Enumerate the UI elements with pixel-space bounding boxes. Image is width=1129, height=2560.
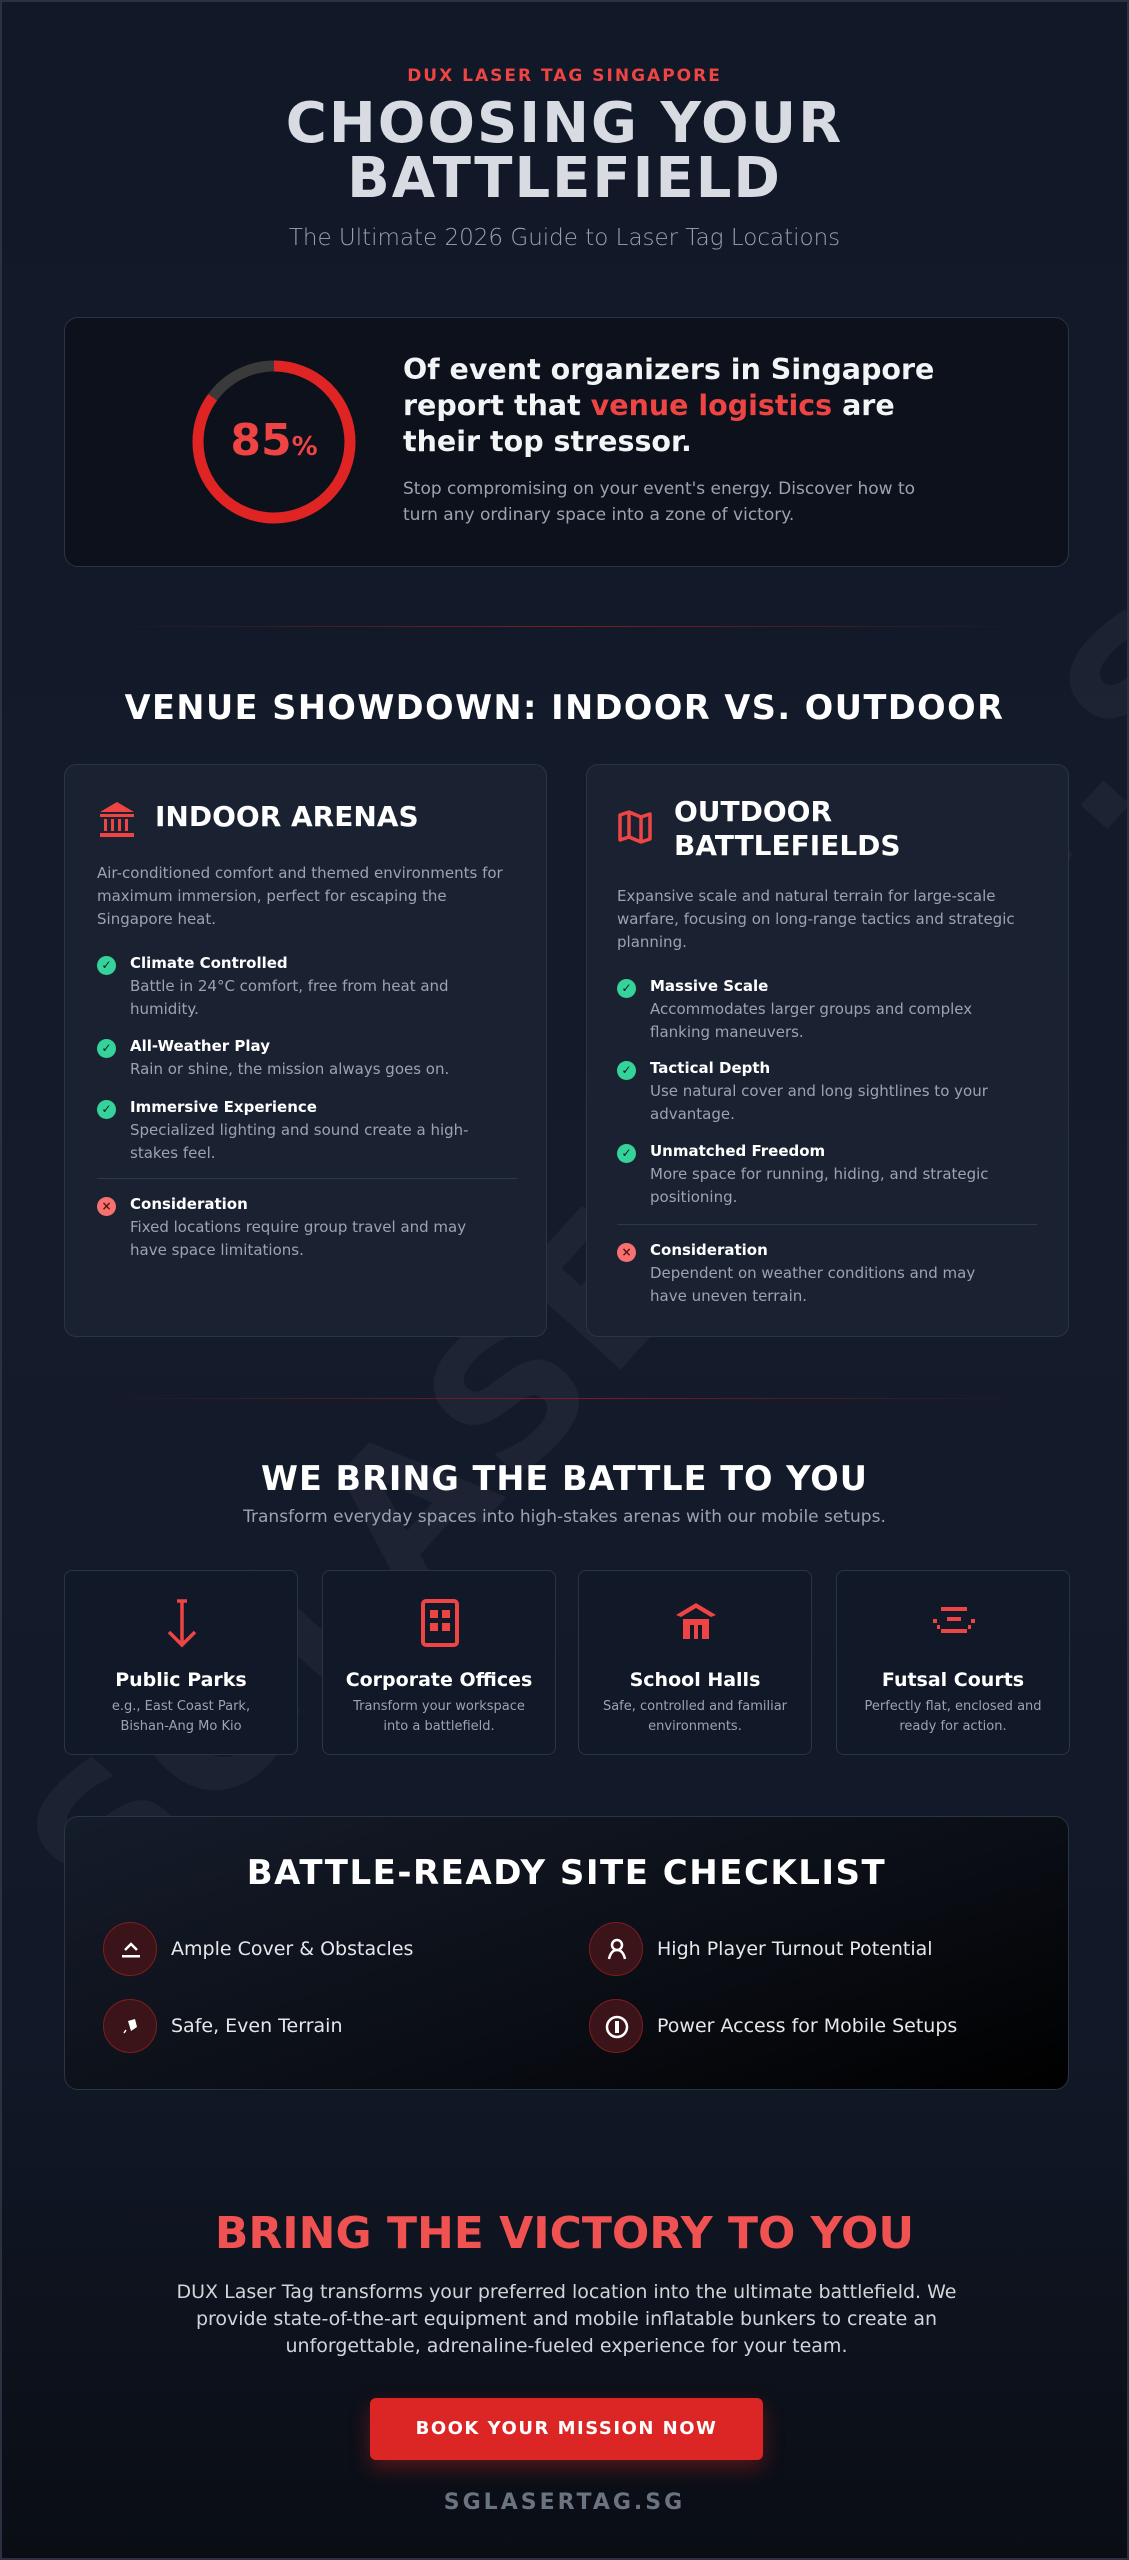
item: Rain or shine, the mission always goes on. — [130, 1060, 449, 1078]
panel: checklist — [64, 1816, 1069, 2090]
button: book: BOOK YOUR MISSION NOW — [416, 2418, 717, 2439]
item: Use natural cover and long sightlines to your advantage. — [650, 1082, 988, 1123]
icon: building — [100, 802, 134, 837]
card: offices: Transform your workspace — [353, 1699, 525, 1714]
card: parks: e.g., East Coast Park, — [112, 1699, 250, 1714]
stat headline: Of event organizers in Singapore report that venue logistics are their top stressor. — [403, 353, 934, 458]
item: ✓ — [101, 1041, 112, 1055]
card: futsal: Perfectly flat, enclosed and — [864, 1699, 1042, 1714]
heading: bring the battle: WE BRING THE BATTLE TO YOU — [261, 1459, 868, 1498]
item: ✓ — [621, 1146, 632, 1160]
card: school: School Halls — [630, 1669, 760, 1691]
item: consideration: Dependent on weather conditions and may have uneven terrain. — [650, 1264, 975, 1305]
card: offices: into a battlefield. — [383, 1719, 495, 1734]
eyebrow: DUX LASER TAG SINGAPORE — [407, 66, 722, 86]
card: futsal: Futsal Courts — [882, 1669, 1024, 1691]
heading: outdoor: BATTLEFIELDS — [674, 829, 901, 862]
item: turnout: High Player Turnout Potential — [657, 1938, 933, 1960]
card: futsal: ready for action. — [899, 1719, 1007, 1734]
item: consideration: Consideration — [130, 1195, 248, 1213]
item: ✓ — [101, 958, 112, 972]
card: futsal — [836, 1570, 1070, 1755]
item: cover: Ample Cover & Obstacles — [171, 1938, 413, 1960]
item: cover — [103, 1922, 413, 1976]
item: ✓ — [101, 1102, 112, 1116]
item: consideration — [97, 1195, 466, 1259]
title: BATTLEFIELD — [347, 146, 782, 211]
item: Immersive Experience — [130, 1098, 317, 1116]
item: consideration: × — [101, 1199, 112, 1213]
item: consideration — [617, 1241, 975, 1305]
panel: outdoor — [586, 764, 1069, 1337]
stat body: Stop compromising on your event's energy. Discover how to turn any ordinary space into a zone of victory. — [403, 479, 915, 525]
card: parks: Bishan-Ang Mo Kio — [120, 1719, 242, 1734]
heading: venue showdown: VENUE SHOWDOWN: INDOOR VS. OUTDOOR — [125, 688, 1004, 727]
icon: arrow down — [168, 1599, 196, 1648]
panel: indoor — [64, 764, 547, 1337]
card: school: environments. — [648, 1719, 742, 1734]
button: book — [370, 2398, 763, 2460]
heading: outdoor — [674, 795, 901, 862]
item — [97, 1098, 469, 1162]
card: school: Safe, controlled and familiar — [603, 1699, 787, 1714]
item: power — [589, 1999, 957, 2053]
item — [617, 977, 972, 1041]
heading: indoor: INDOOR ARENAS — [155, 800, 419, 833]
item: terrain: Safe, Even Terrain — [171, 2015, 343, 2037]
item: ✓ — [621, 981, 632, 995]
text: indoor desc: Air-conditioned comfort and themed environments for maximum immersion, perfect for escaping the Singapore heat. — [97, 864, 503, 928]
text: outdoor desc: Expansive scale and natural terrain for large-scale warfare, focusing on long-range tactics and strategic planning. — [617, 887, 1015, 951]
icon: office — [421, 1599, 459, 1647]
item: Tactical Depth — [650, 1059, 770, 1077]
icon: school — [676, 1603, 716, 1639]
heading: outdoor: OUTDOOR — [674, 795, 832, 828]
panel: stat — [64, 317, 1069, 567]
item: Specialized lighting and sound create a high-stakes feel. — [130, 1121, 469, 1162]
subheading: Transform everyday spaces into high-stakes arenas with our mobile setups. — [243, 1507, 886, 1527]
card: offices: Corporate Offices — [346, 1669, 532, 1691]
item: More space for running, hiding, and strategic positioning. — [650, 1165, 989, 1206]
card: parks: Public Parks — [115, 1669, 247, 1691]
item: Massive Scale — [650, 977, 768, 995]
chart: 85% ring: 85% — [230, 415, 318, 466]
icon: court — [933, 1607, 975, 1633]
item — [97, 954, 449, 1018]
text: closing paragraph: DUX Laser Tag transforms your preferred location into the ultimate battlefield. We provide state-of-the-art equipment and mobile inflatable bunkers to create an unforgettable, adrenaline-fueled experience for your team. — [177, 2281, 956, 2357]
item: consideration: Consideration — [650, 1241, 768, 1259]
heading: checklist: BATTLE-READY SITE CHECKLIST — [247, 1853, 886, 1893]
item: ✓ — [621, 1063, 632, 1077]
item: Climate Controlled — [130, 954, 288, 972]
item: Battle in 24°C comfort, free from heat and humidity. — [130, 977, 449, 1018]
item: consideration: × — [621, 1245, 632, 1259]
item: Unmatched Freedom — [650, 1142, 825, 1160]
icon: map — [618, 810, 652, 844]
footer url: SGLASERTAG.SG — [444, 2490, 685, 2515]
item: terrain — [103, 1999, 343, 2053]
title: CHOOSING YOUR — [286, 91, 843, 156]
heading: bring the victory: BRING THE VICTORY TO YOU — [215, 2208, 914, 2259]
item — [617, 1142, 989, 1206]
item — [617, 1059, 988, 1123]
item: All-Weather Play — [130, 1037, 270, 1055]
item — [97, 1037, 449, 1078]
item: turnout — [589, 1922, 933, 1976]
subtitle: The Ultimate 2026 Guide to Laser Tag Locations — [289, 225, 840, 251]
card: parks — [64, 1570, 298, 1755]
title — [286, 91, 843, 211]
card: offices — [322, 1570, 556, 1755]
card: school — [578, 1570, 812, 1755]
item: Accommodates larger groups and complex flanking maneuvers. — [650, 1000, 972, 1041]
item: consideration: Fixed locations require group travel and may have space limitations. — [130, 1218, 466, 1259]
chart: 85% ring — [192, 360, 356, 524]
item: power: Power Access for Mobile Setups — [657, 2015, 957, 2037]
